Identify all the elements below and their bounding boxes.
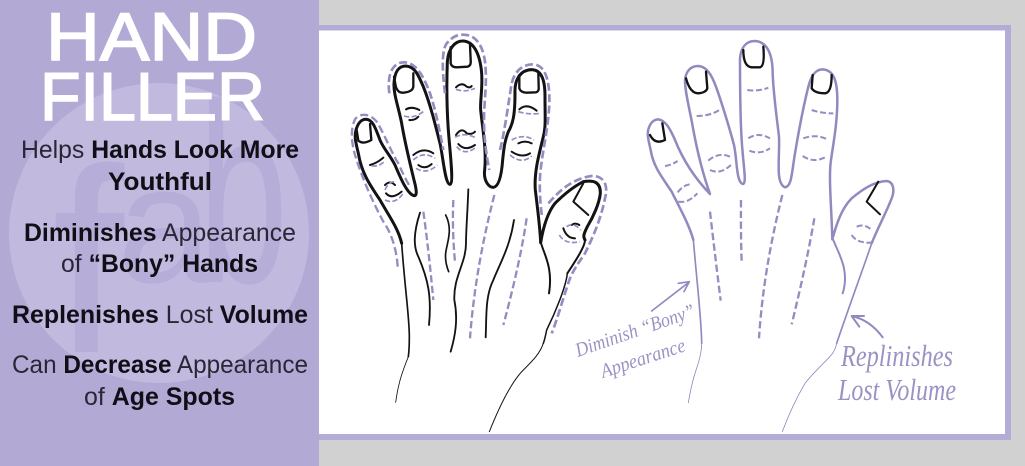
left hand illustration: before <box>352 35 606 432</box>
logo watermark <box>9 51 309 408</box>
hand outline: black <box>355 41 600 432</box>
benefit: youthful hands: Helps Hands Look More <box>21 136 299 164</box>
fingernails: black <box>357 45 588 215</box>
arrow: replenishes lost volume <box>852 316 883 337</box>
knuckle and vein dashes <box>665 88 872 338</box>
title: HAND <box>46 0 257 75</box>
illustration frame <box>319 25 1011 440</box>
benefit: age spots: Can Decrease Appearance <box>12 351 308 379</box>
benefit: bony hands: Diminishes Appearance <box>24 219 296 247</box>
annotation: diminish bony appearance: Diminish “Bony” <box>572 300 698 362</box>
benefit: age spots <box>12 351 308 411</box>
title <box>40 0 265 135</box>
annotation: diminish bony appearance: Appearance <box>596 335 688 383</box>
knuckle creases: black <box>370 84 579 238</box>
hand outline: lavender <box>648 41 893 432</box>
logo watermark: f <box>52 114 125 408</box>
benefit: bony hands <box>24 219 296 278</box>
benefit: bony hands: of “Bony” Hands <box>61 250 258 278</box>
benefit: youthful hands <box>21 136 299 196</box>
annotation: diminish bony appearance <box>572 300 698 383</box>
benefit: lost volume: Replenishes Lost Volume <box>12 301 308 329</box>
arrow: diminish bony appearance <box>652 282 689 311</box>
benefit: age spots: of Age Spots <box>84 383 235 411</box>
logo watermark: b <box>198 51 288 337</box>
panel: hand filler benefits <box>0 0 319 466</box>
annotation: replinishes lost volume: Lost Volume <box>837 372 956 407</box>
fingernails: black <box>650 47 880 214</box>
logo watermark: a <box>117 130 214 318</box>
dashed treatment envelope <box>352 35 606 338</box>
right hand illustration: after <box>648 41 893 432</box>
hand veins: black <box>415 189 514 352</box>
benefit: youthful hands: Youthful <box>108 168 212 196</box>
annotation: replinishes lost volume <box>837 338 956 407</box>
title: FILLER <box>40 59 265 135</box>
annotation: replinishes lost volume: Replinishes <box>840 338 953 373</box>
